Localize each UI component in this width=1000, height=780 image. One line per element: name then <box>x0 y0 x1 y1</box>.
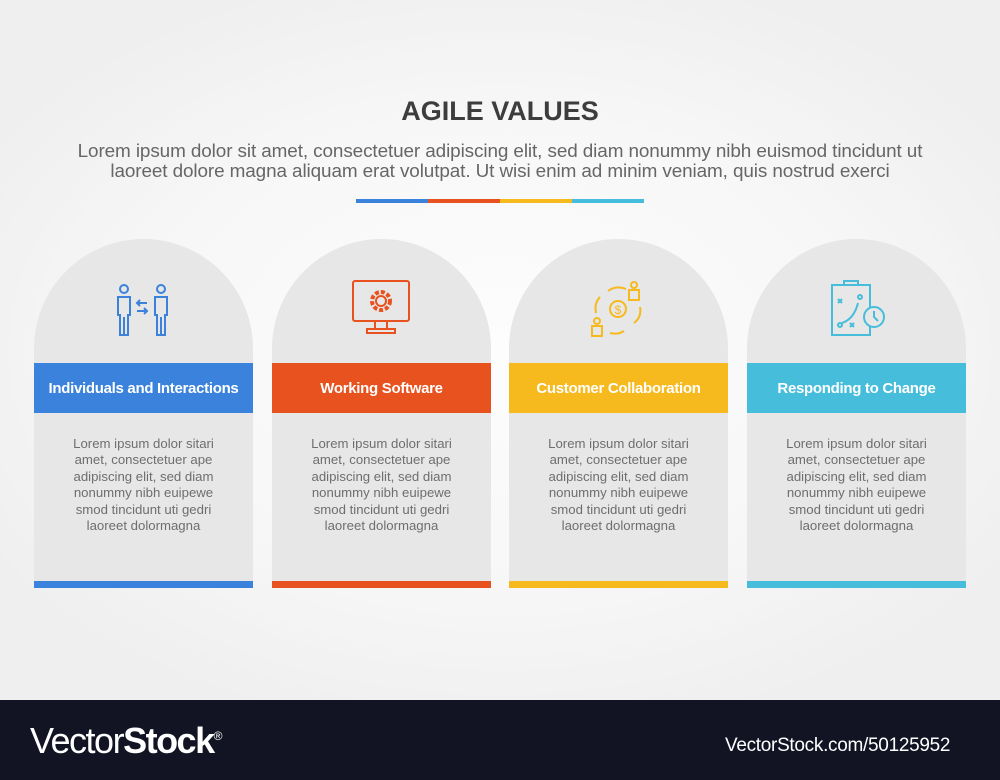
body text: smod tincidunt uti gedri <box>314 502 449 517</box>
subtitle: Lorem ipsum dolor sit amet, consectetuer adipiscing elit, sed diam nonummy nibh euismod tincidunt ut <box>78 141 922 162</box>
body text: adipiscing elit, sed diam <box>548 469 688 484</box>
body text: amet, consectetuer ape <box>75 452 212 467</box>
body text <box>311 436 452 533</box>
color divider <box>356 199 644 203</box>
body text: smod tincidunt uti gedri <box>789 502 924 517</box>
body text: laoreet dolormagna <box>325 518 438 533</box>
icon: monitor gear <box>352 280 410 334</box>
body text: Lorem ipsum dolor sitari <box>73 436 214 451</box>
panel: customer collaboration <box>509 239 728 588</box>
band label: Responding to Change <box>777 380 936 396</box>
body text: adipiscing elit, sed diam <box>786 469 926 484</box>
body text: laoreet dolormagna <box>562 518 675 533</box>
body text: adipiscing elit, sed diam <box>311 469 452 484</box>
panel: working software <box>272 239 491 588</box>
footer url: VectorStock.com/50125952 <box>725 735 950 756</box>
subtitle <box>78 141 922 182</box>
body text: Lorem ipsum dolor sitari <box>786 436 927 451</box>
panel: individuals <box>34 239 253 588</box>
band label: Working Software <box>320 380 443 396</box>
body text: amet, consectetuer ape <box>788 452 925 467</box>
body text: smod tincidunt uti gedri <box>551 502 686 517</box>
subtitle: laoreet dolore magna aliquam erat volutpat. Ut wisi enim ad minim veniam, quis nostrud exerci <box>110 161 890 182</box>
body text: Lorem ipsum dolor sitari <box>311 436 452 451</box>
icon: people exchange <box>117 284 168 336</box>
body text: smod tincidunt uti gedri <box>76 502 211 517</box>
band label <box>747 363 966 413</box>
band label <box>509 363 728 413</box>
footer <box>0 700 1000 780</box>
icon: customer money cycle <box>591 281 642 337</box>
body text: nonummy nibh euipewe <box>74 485 213 500</box>
body text <box>73 436 214 533</box>
body text: amet, consectetuer ape <box>550 452 687 467</box>
body text: nonummy nibh euipewe <box>787 485 926 500</box>
band label: Individuals and Interactions <box>48 380 238 396</box>
band label <box>34 363 253 413</box>
footer logo: VectorStock® <box>30 720 221 761</box>
band label: Customer Collaboration <box>536 380 701 396</box>
icon: customer money cycle: $ <box>615 303 622 317</box>
body text <box>548 436 689 533</box>
body text: laoreet dolormagna <box>800 518 913 533</box>
icon: clipboard clock <box>831 280 885 336</box>
band label <box>272 363 491 413</box>
body text: laoreet dolormagna <box>87 518 200 533</box>
body text: nonummy nibh euipewe <box>312 485 451 500</box>
body text: adipiscing elit, sed diam <box>73 469 214 484</box>
body text: Lorem ipsum dolor sitari <box>548 436 689 451</box>
body text <box>786 436 927 533</box>
title: AGILE VALUES <box>401 96 599 126</box>
body text: nonummy nibh euipewe <box>549 485 688 500</box>
body text: amet, consectetuer ape <box>313 452 450 467</box>
panel: responding to change <box>747 239 966 588</box>
